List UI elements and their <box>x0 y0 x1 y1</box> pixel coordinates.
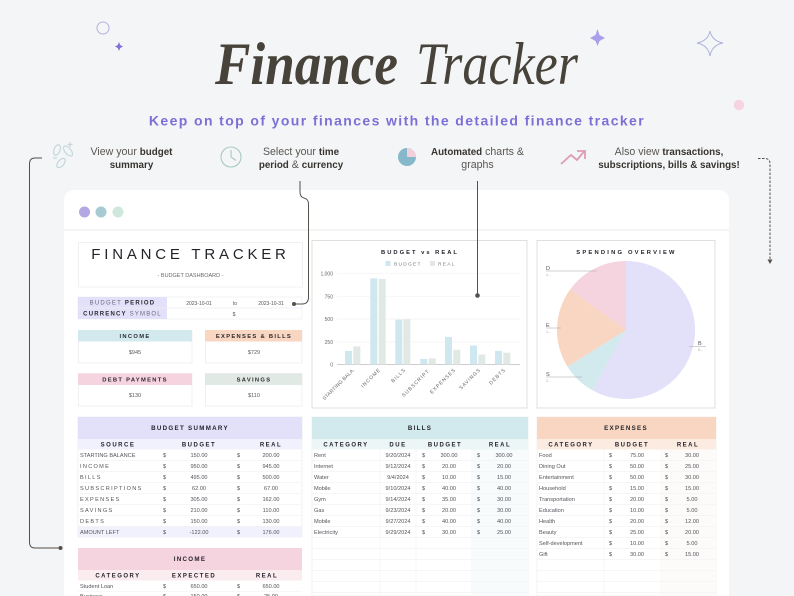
bar chart: budget vs real: DEBTS <box>488 367 507 386</box>
table: budget summary: REAL <box>260 442 282 448</box>
table: bills: Electricity <box>314 530 338 536</box>
table: expenses: $ <box>609 475 613 481</box>
table: budget summary: 945.00 <box>262 464 280 470</box>
table: budget summary: 150.00 <box>190 519 208 525</box>
icon: trend arrow <box>561 151 585 164</box>
bar chart: budget vs real: BILLS <box>390 367 407 384</box>
table: budget summary: DEBTS <box>80 519 105 525</box>
table: budget summary: 62.00 <box>192 486 206 492</box>
arrow: time period connector <box>292 181 308 306</box>
table: budget summary: 67.00 <box>264 486 278 492</box>
card: savings: $110 <box>248 393 260 399</box>
panel: budget period: 2023-10-01 <box>186 301 212 307</box>
table: bills: 20.00 <box>442 508 456 514</box>
table: expenses: BUDGET <box>615 442 649 448</box>
table: budget summary: $ <box>163 475 167 481</box>
table: bills: $ <box>422 475 426 481</box>
table: budget summary: AMOUNT LEFT <box>80 530 120 536</box>
table: bills: 9/14/2024 <box>386 497 410 503</box>
table: bills: $ <box>477 497 481 503</box>
table: expenses: $ <box>609 541 613 547</box>
table: expenses: 5.00 <box>687 497 697 503</box>
table: bills: Mobile <box>314 486 330 492</box>
panel: budget period: BUDGET PERIOD <box>90 300 155 306</box>
table: expenses: $ <box>609 486 613 492</box>
table: budget summary: 162.00 <box>262 497 280 503</box>
table: expenses: $ <box>609 519 613 525</box>
table: income: REAL <box>256 574 278 580</box>
table: budget summary: $ <box>237 464 241 470</box>
panel: budget period: $ <box>233 312 236 318</box>
table: bills: 30.00 <box>497 497 511 503</box>
table: bills: 300.00 <box>440 453 458 459</box>
table: expenses <box>537 417 716 596</box>
table: expenses: Household <box>539 486 566 492</box>
bar chart: budget vs real: 1,000 <box>320 272 333 278</box>
table: bills: $ <box>422 519 426 525</box>
bar chart: budget vs real: 250 <box>325 340 333 346</box>
table: expenses: 50.00 <box>630 464 644 470</box>
table: bills: Gym <box>314 497 326 503</box>
panel: dashboard title box: - BUDGET DASHBOARD - <box>158 273 224 279</box>
icon: coins <box>52 142 74 169</box>
table: expenses: $ <box>665 497 669 503</box>
table: income: INCOME <box>174 556 206 563</box>
pie chart: spending overview: D <box>546 266 550 272</box>
table: expenses: $ <box>609 464 613 470</box>
pie chart: spending overview <box>537 240 715 408</box>
table: bills: 9/4/2024 <box>387 475 409 481</box>
table: expenses: $ <box>665 552 669 558</box>
table: expenses: 20.00 <box>630 519 644 525</box>
bar chart: budget vs real: 0 <box>330 362 333 368</box>
table: expenses: Transportation <box>539 497 575 503</box>
title: Finance <box>214 31 398 97</box>
table: expenses: $ <box>665 541 669 547</box>
table: budget summary: SUBSCRIPTIONS <box>80 486 143 492</box>
feature text: budget summary: View your budget <box>91 146 172 158</box>
table: expenses: Health <box>539 519 555 525</box>
table: bills: $ <box>477 519 481 525</box>
table: budget summary: $ <box>163 486 167 492</box>
table: expenses: Self-development <box>539 541 583 547</box>
feature text: time period: period <box>259 160 289 171</box>
table: bills: Internet <box>314 464 333 470</box>
table: budget summary: BUDGET SUMMARY <box>151 425 229 432</box>
table: bills: 35.00 <box>442 497 456 503</box>
table: bills: $ <box>477 530 481 536</box>
bar chart: budget vs real: INCOME <box>360 367 382 389</box>
table: expenses: 25.00 <box>685 464 699 470</box>
table: income: CATEGORY <box>95 574 141 580</box>
table: budget summary: 176.00 <box>262 530 280 536</box>
table: bills: 9/20/2024 <box>386 453 410 459</box>
table: expenses: EXPENSES <box>604 425 648 432</box>
table: budget summary: $ <box>237 519 241 525</box>
feature text: budget summary: summary <box>110 160 154 171</box>
table: expenses: 25.00 <box>630 530 644 536</box>
table: income: 650.00 <box>190 584 208 590</box>
table: bills: $ <box>477 486 481 492</box>
table: expenses: $ <box>609 552 613 558</box>
card: expenses and bills <box>205 330 302 363</box>
table: bills: 9/29/2024 <box>386 530 410 536</box>
table: expenses: $ <box>665 464 669 470</box>
bar chart: budget vs real: 750 <box>325 294 333 300</box>
table: budget summary: BUDGET <box>182 442 216 448</box>
table: budget summary: $ <box>237 453 241 459</box>
card: debt payments: $130 <box>129 393 141 399</box>
table: expenses: 20.00 <box>630 497 644 503</box>
table: bills: 10.00 <box>442 475 456 481</box>
table: bills: $ <box>422 530 426 536</box>
panel: dashboard title box: FINANCE TRACKER <box>91 246 290 263</box>
table: expenses: $ <box>609 497 613 503</box>
table: budget summary: 305.00 <box>190 497 208 503</box>
table: expenses: $ <box>665 519 669 525</box>
card: expenses and bills: $729 <box>248 350 260 356</box>
table: expenses: $ <box>665 486 669 492</box>
decoration: small purple star <box>115 42 123 51</box>
table: budget summary: $ <box>163 530 167 536</box>
table: expenses: $ <box>665 453 669 459</box>
table: expenses: Gift <box>539 552 548 558</box>
panel: budget period <box>78 297 302 319</box>
feature text: charts: graphs <box>461 159 494 171</box>
table: budget summary: $ <box>163 453 167 459</box>
table: bills: $ <box>422 486 426 492</box>
table: bills: $ <box>422 508 426 514</box>
table: bills: $ <box>477 508 481 514</box>
table: expenses: Beauty <box>539 530 557 536</box>
table: budget summary: $ <box>237 530 241 536</box>
panel: budget period: to <box>233 301 237 307</box>
pie chart: spending overview: SPENDING OVERVIEW <box>576 250 677 256</box>
table: budget summary: -122.00 <box>190 530 208 536</box>
pie chart: spending overview: 2... <box>546 379 551 383</box>
decoration: outline sparkle <box>697 31 723 56</box>
arrow: charts connector <box>475 181 480 298</box>
table: bills: 9/10/2024 <box>386 486 410 492</box>
table: budget summary: INCOME <box>80 464 110 470</box>
bar chart: budget vs real: STARTING BALA. <box>322 367 356 402</box>
table: income: Student Loan <box>80 584 113 590</box>
table: bills: 40.00 <box>497 519 511 525</box>
table: bills: Water <box>314 475 329 481</box>
table: budget summary: $ <box>163 464 167 470</box>
table: income: $ <box>163 584 167 590</box>
table: budget summary: STARTING BALANCE <box>80 453 136 459</box>
feature text: charts: Automated charts & <box>431 146 524 158</box>
feature text: transactions: subscriptions, bills & savings! <box>598 160 740 171</box>
subtitle: Keep on top of your finances with the detailed finance tracker <box>149 112 645 128</box>
decoration: pink dot <box>734 100 744 110</box>
bar chart: budget vs real: 500 <box>325 317 333 323</box>
arrow: budget summary connector <box>30 158 62 550</box>
feature text: time period: Select your time <box>263 146 339 158</box>
card: debt payments <box>78 374 192 406</box>
pie chart: spending overview: B <box>698 341 702 347</box>
table: expenses: $ <box>609 530 613 536</box>
feature text: time period: & currency <box>292 159 343 171</box>
table: expenses: $ <box>609 508 613 514</box>
table: bills: 25.00 <box>497 530 511 536</box>
bar chart: budget vs real: EXPENSES <box>429 367 457 396</box>
table: budget summary: 500.00 <box>262 475 280 481</box>
card: income <box>78 330 192 363</box>
panel: dashboard window <box>64 190 729 596</box>
table: bills: 40.00 <box>442 486 456 492</box>
card: income: $945 <box>129 350 141 356</box>
table: expenses: CATEGORY <box>548 442 594 448</box>
card: savings: SAVINGS <box>237 378 271 384</box>
table: expenses: 12.00 <box>685 519 699 525</box>
table: expenses: 5.00 <box>687 541 697 547</box>
card: income: INCOME <box>120 334 150 340</box>
table: bills: 40.00 <box>497 486 511 492</box>
table: expenses: 10.00 <box>630 508 644 514</box>
table: budget summary: $ <box>237 486 241 492</box>
title: Tracker <box>416 31 579 97</box>
panel: budget period: 2023-10-31 <box>258 301 284 307</box>
bar chart: budget vs real <box>312 240 527 408</box>
table: bills: $ <box>422 453 426 459</box>
feature text: transactions: Also view transactions, <box>615 146 723 158</box>
pie chart: spending overview: 1... <box>546 330 551 334</box>
table: bills: Gas <box>314 508 324 514</box>
table: expenses: $ <box>665 530 669 536</box>
table: budget summary: $ <box>237 497 241 503</box>
panel: budget period: CURRENCY SYMBOL <box>83 312 162 318</box>
table: bills: 30.00 <box>497 508 511 514</box>
bar chart: budget vs real: BUDGET vs REAL <box>381 250 459 256</box>
table: bills: 9/27/2024 <box>386 519 410 525</box>
table: bills: 30.00 <box>442 530 456 536</box>
table: expenses: 15.00 <box>630 486 644 492</box>
pie chart: spending overview: S <box>546 372 550 378</box>
decoration: lavender sparkle <box>590 29 605 46</box>
pie chart: spending overview: 1... <box>546 273 551 277</box>
table: bills: REAL <box>489 442 511 448</box>
table: bills: $ <box>422 464 426 470</box>
table: expenses: 5.00 <box>687 508 697 514</box>
table: bills: $ <box>477 453 481 459</box>
table: budget summary: $ <box>237 475 241 481</box>
icon: pie chart <box>398 148 416 166</box>
table: budget summary: 210.00 <box>190 508 208 514</box>
table: budget summary: 110.00 <box>263 508 279 514</box>
table: bills: 9/12/2024 <box>386 464 410 470</box>
table: bills: 20.00 <box>497 464 511 470</box>
table: income: 650.00 <box>262 584 280 590</box>
bar chart: budget vs real: SAVINGS <box>458 367 482 391</box>
table: budget summary: $ <box>163 519 167 525</box>
table: budget summary: BILLS <box>80 475 102 481</box>
table: budget summary: SOURCE <box>101 442 135 448</box>
table: budget summary: EXPENSES <box>80 497 121 503</box>
bar chart: budget vs real: REAL <box>438 262 456 268</box>
table: bills: Rent <box>314 453 326 459</box>
pie chart: spending overview: E <box>546 323 550 329</box>
table: bills: 40.00 <box>442 519 456 525</box>
table: expenses: Food <box>539 453 552 459</box>
table: expenses: 75.00 <box>630 453 644 459</box>
table: budget summary: 200.00 <box>262 453 280 459</box>
table: expenses: REAL <box>677 442 699 448</box>
table: expenses: $ <box>609 453 613 459</box>
table: budget summary: 950.00 <box>190 464 208 470</box>
arrow: dashed connector <box>758 158 772 264</box>
table: expenses: Education <box>539 508 564 514</box>
table: budget summary: $ <box>163 508 167 514</box>
table: expenses: 30.00 <box>630 552 644 558</box>
bar chart: budget vs real: BUDGET <box>394 262 422 268</box>
table: expenses: 15.00 <box>685 552 699 558</box>
table: expenses: 30.00 <box>685 453 699 459</box>
table: expenses: 15.00 <box>685 486 699 492</box>
table: bills: DUE <box>389 442 407 448</box>
table: budget summary: $ <box>237 508 241 514</box>
table: bills: BUDGET <box>428 442 462 448</box>
bar chart: budget vs real: SUBSCRIPT. <box>401 367 432 399</box>
card: debt payments: DEBT PAYMENTS <box>102 378 168 384</box>
table: bills: 20.00 <box>442 464 456 470</box>
icon: clock <box>221 147 241 167</box>
table: income <box>78 548 302 596</box>
decoration: circle outline <box>97 22 109 34</box>
table: bills: $ <box>477 464 481 470</box>
table: bills: 300.00 <box>495 453 513 459</box>
table: income: $ <box>237 584 241 590</box>
table: expenses: 30.00 <box>685 475 699 481</box>
table: bills: CATEGORY <box>323 442 369 448</box>
table: expenses: 50.00 <box>630 475 644 481</box>
table: bills: Mobile <box>314 519 330 525</box>
table: expenses: Dining Out <box>539 464 566 470</box>
card: expenses and bills: EXPENSES & BILLS <box>216 334 292 340</box>
table: expenses: 10.00 <box>630 541 644 547</box>
table: bills: $ <box>422 497 426 503</box>
table: expenses: $ <box>665 508 669 514</box>
table: budget summary: SAVINGS <box>80 508 114 514</box>
table: bills: $ <box>477 475 481 481</box>
table: income: EXPECTED <box>172 574 216 580</box>
table: bills: BILLS <box>408 425 432 432</box>
table: expenses: $ <box>665 475 669 481</box>
panel: dashboard title box <box>78 242 302 287</box>
table: expenses: 20.00 <box>685 530 699 536</box>
table: budget summary <box>78 417 302 537</box>
table: bills: 15.00 <box>497 475 511 481</box>
table: bills <box>312 417 528 596</box>
table: expenses: Entertainment <box>539 475 574 481</box>
table: budget summary: 130.00 <box>262 519 280 525</box>
table: budget summary: $ <box>163 497 167 503</box>
table: budget summary: 150.00 <box>190 453 208 459</box>
pie chart: spending overview: 5... <box>698 348 703 352</box>
title <box>214 31 579 97</box>
table: budget summary: 495.00 <box>190 475 208 481</box>
card: savings <box>205 374 302 406</box>
table: bills: 9/23/2024 <box>386 508 410 514</box>
